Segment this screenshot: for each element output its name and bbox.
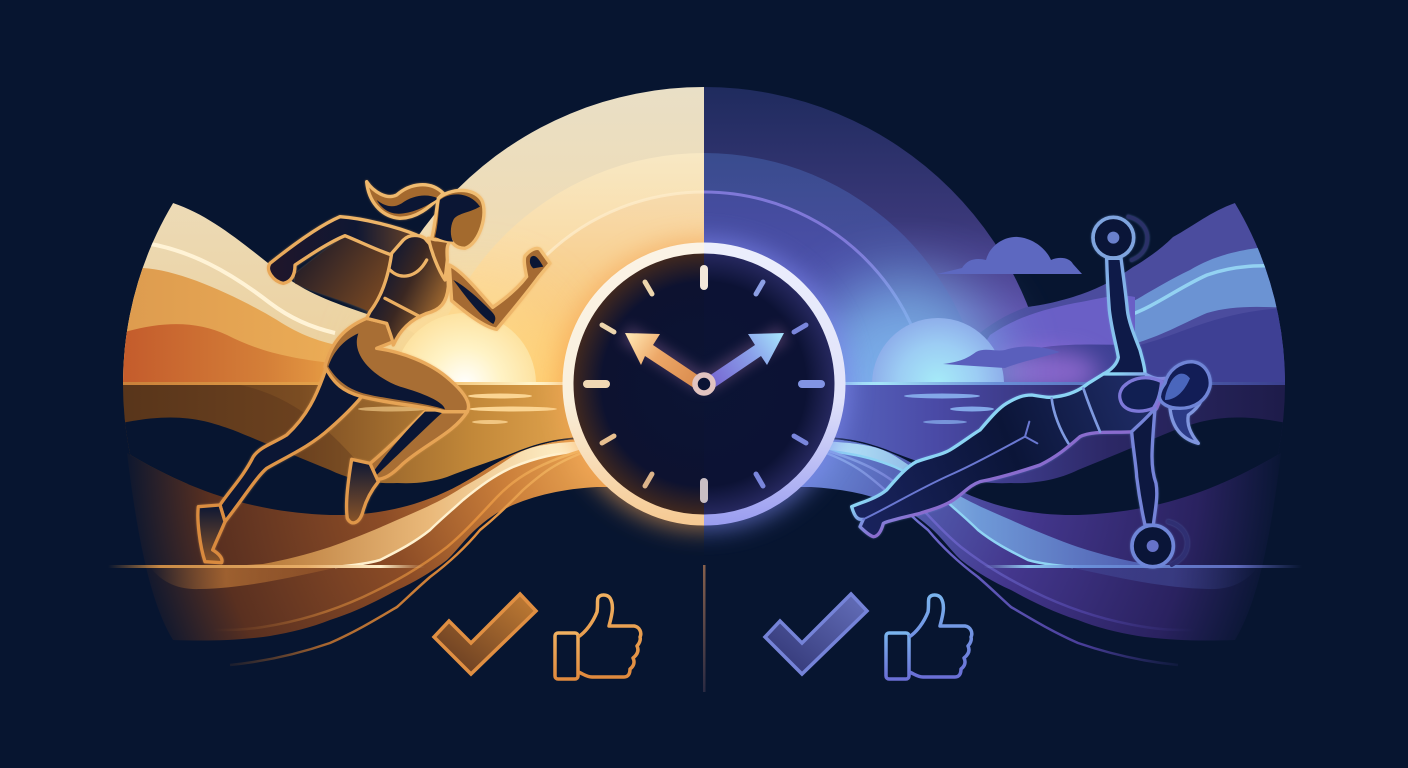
left hand arrow: [625, 333, 705, 390]
back plate arcs: [1128, 217, 1147, 260]
sky half circle: [355, 87, 704, 436]
moon reflections: [904, 394, 994, 424]
icon: blue check mark: [765, 594, 867, 674]
orange tail line: [230, 450, 590, 665]
clock ring right: [704, 248, 840, 520]
horizon line: [123, 382, 562, 385]
floor line: [108, 565, 548, 568]
rear shoe: [198, 505, 225, 563]
lower purple band: [1000, 308, 1290, 384]
bottom back plate arcs: [1168, 522, 1187, 565]
icon: orange thumbs up: [555, 595, 641, 679]
sleeve shoulder: [1120, 378, 1162, 411]
lower brown swoosh: [127, 439, 704, 641]
clock center pin: [695, 375, 713, 393]
upper cloud: [937, 237, 1082, 274]
hair highlight: [1165, 374, 1190, 400]
night sea: [834, 385, 1285, 484]
ribbon bright edge: [335, 450, 590, 567]
rising sun: [402, 313, 536, 382]
orange thumb cuff: [555, 633, 578, 679]
panel: evening scene: [704, 87, 1308, 484]
band under night floor: [1068, 567, 1258, 589]
dark sea swell: [182, 385, 354, 476]
clock face right: [704, 253, 835, 515]
bottom dumbbell: [1132, 522, 1187, 567]
hair shading: [435, 194, 480, 242]
magenta glow: [990, 350, 1100, 394]
white wave line: [145, 243, 335, 333]
shadow under arm: [295, 237, 390, 312]
blue ribbon bright edge: [818, 450, 1073, 567]
innermost sky disc: [476, 192, 704, 420]
night horizon line: [846, 382, 1285, 385]
neck: [428, 238, 450, 280]
blue band: [1135, 248, 1276, 342]
cream wave: [123, 203, 367, 378]
back arm: [269, 217, 417, 283]
night floor line: [860, 565, 1302, 568]
band under floor: [150, 567, 340, 589]
clock glow orange: [545, 228, 704, 547]
rust wave: [123, 324, 324, 382]
hips and thigh: [325, 318, 468, 412]
body: [852, 374, 1165, 537]
central blue glow: [814, 242, 1030, 382]
centre divider: [703, 565, 706, 692]
head: [1159, 362, 1210, 408]
purple wave: [987, 296, 1135, 350]
purple tail line: [818, 450, 1178, 665]
leg separation line: [863, 422, 1037, 519]
front arm: [449, 248, 550, 329]
orange ribbon line: [213, 448, 590, 630]
purple ribbon line: [818, 448, 1195, 630]
sea: [123, 385, 574, 484]
clock: [558, 238, 850, 530]
lower purple swoosh: [704, 439, 1281, 641]
waistband: [1052, 388, 1100, 443]
right hand arrow: [703, 333, 784, 390]
clock ring left: [568, 248, 704, 520]
innermost night sky disc: [704, 192, 932, 420]
ponytail: [1170, 400, 1202, 443]
water reflections: [358, 394, 557, 424]
icon: orange check mark: [434, 594, 536, 674]
navy thigh shading: [328, 333, 445, 409]
panel: morning scene: [100, 87, 704, 484]
inner night sky disc: [704, 153, 987, 436]
blue thumb cuff: [886, 633, 909, 679]
ponytail: [367, 182, 443, 218]
front shoe: [347, 459, 378, 523]
orange wave: [123, 268, 332, 379]
supporting arm: [1132, 408, 1157, 525]
front calf navy: [373, 412, 443, 475]
head: [432, 190, 484, 248]
icon: blue thumbs up: [886, 595, 972, 679]
blue hand: [909, 595, 972, 677]
front arm navy shading: [453, 280, 495, 324]
infographic canvas: [110, 87, 1298, 692]
orange hand: [578, 595, 641, 677]
fist shading: [530, 256, 543, 268]
cloud in front of sun: [943, 346, 1060, 368]
sports bra band: [385, 260, 427, 317]
panel: evening lower waves: [801, 418, 1298, 666]
ponytail navy: [377, 196, 438, 214]
sun glow: [350, 272, 564, 382]
rear leg: [220, 367, 362, 522]
moon sun: [872, 318, 1004, 382]
top plate: [1093, 217, 1134, 258]
clock face left: [573, 253, 704, 515]
bottom plate: [1132, 525, 1173, 567]
sky arc line: [476, 192, 704, 420]
hour ticks: [587, 269, 821, 499]
figure: side plank with dumbbells: [852, 217, 1210, 567]
top purple wave: [980, 203, 1285, 381]
figure: runner: [198, 182, 550, 563]
night dark wave: [834, 418, 1283, 484]
night sky arc line: [704, 192, 932, 420]
bottom hub: [1147, 540, 1159, 552]
raised arm: [1103, 258, 1145, 374]
light blue ribbon: [818, 441, 1178, 567]
torso: [367, 235, 448, 345]
cream ribbon: [230, 441, 590, 567]
panel: morning lower waves: [110, 418, 607, 666]
clock glow blue: [704, 228, 862, 546]
hand glow: [625, 333, 784, 384]
inner sky disc: [421, 153, 704, 436]
top hub: [1107, 232, 1119, 244]
night sky half circle: [704, 87, 1053, 436]
front calf: [368, 412, 467, 479]
top dumbbell: [1093, 217, 1147, 260]
light blue wave line: [1135, 264, 1266, 315]
dark wave: [125, 418, 574, 484]
